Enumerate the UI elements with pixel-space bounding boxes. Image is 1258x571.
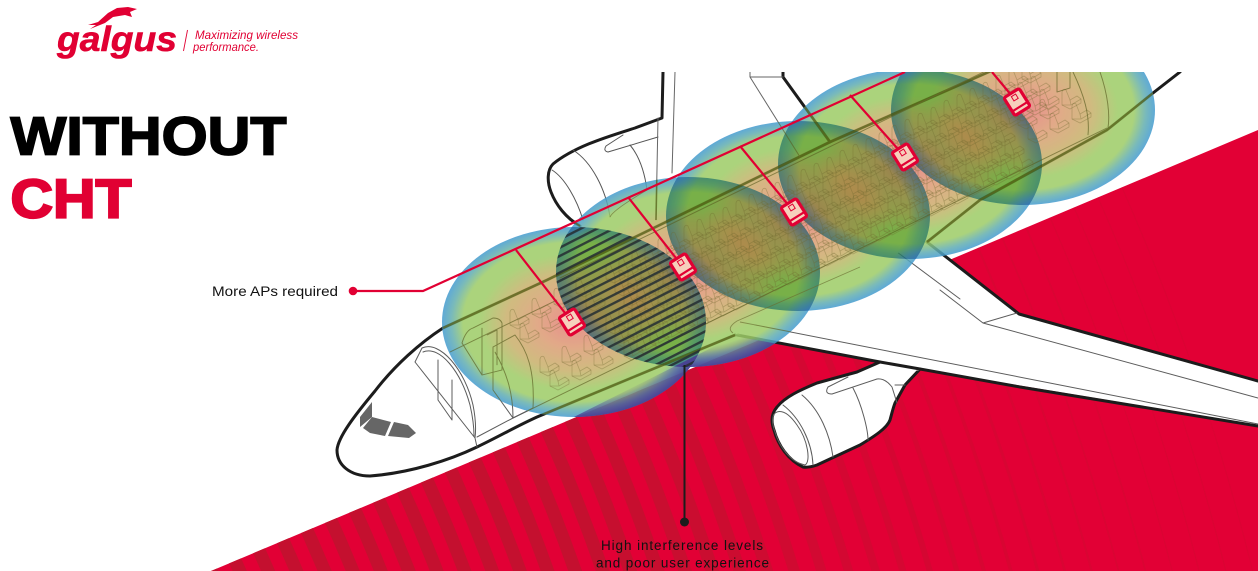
coverage edge tint over red — [574, 338, 775, 417]
access point 3 — [781, 198, 807, 226]
coverage: access point 2 — [556, 177, 820, 367]
concentric signal waves on red — [211, 187, 1226, 571]
fuselage — [337, 64, 1200, 476]
forward door and bulkhead — [415, 72, 1109, 447]
coverage: access point 1 — [442, 227, 706, 417]
seats: front cabin — [510, 277, 613, 390]
seats: rear cabin — [1018, 89, 1091, 143]
icon: leaping animal — [88, 7, 137, 29]
tail fin — [750, 72, 830, 157]
callout text: interference: and poor user experience — [596, 556, 769, 570]
red background panel — [211, 130, 1258, 571]
callout text: interference — [596, 538, 769, 570]
coverage: access point 3 — [666, 121, 930, 311]
plane outlines seen through coverage — [442, 72, 1153, 415]
seats: main cabin upper bank — [606, 63, 1059, 309]
wing — [730, 242, 1258, 426]
callout connector: interference — [680, 365, 689, 526]
coverage: access point 5 — [891, 72, 1155, 205]
tagline: performance. — [192, 42, 259, 54]
rear engine — [548, 72, 675, 226]
interference hatching — [556, 227, 706, 367]
tagline — [192, 30, 298, 54]
access point 2 — [670, 253, 696, 281]
tagline: Maximizing wireless — [195, 30, 298, 42]
access point icons — [559, 88, 1030, 336]
callout text: More APs required: More APs required — [212, 284, 338, 299]
cockpit windows — [360, 402, 416, 438]
divider — [184, 30, 188, 51]
seats: main cabin lower bank — [606, 126, 1033, 360]
wifi coverage ellipses — [442, 72, 1155, 417]
callout connector: More APs required — [349, 72, 1017, 322]
coverage: access point 4 — [778, 69, 1042, 259]
front engine — [772, 362, 920, 467]
access point 4 — [892, 143, 918, 171]
access point 5 — [1004, 88, 1030, 116]
cabin seats — [510, 63, 1091, 390]
title — [10, 106, 286, 230]
access point 1 — [559, 308, 585, 336]
callout text: interference: High interference levels — [601, 538, 763, 553]
airplane illustration — [337, 64, 1258, 476]
title line: CHT: CHT — [10, 168, 132, 230]
title line: WITHOUT: WITHOUT — [10, 106, 286, 166]
wordmark: galgus — [56, 20, 177, 59]
logo: galgus — [56, 7, 298, 59]
